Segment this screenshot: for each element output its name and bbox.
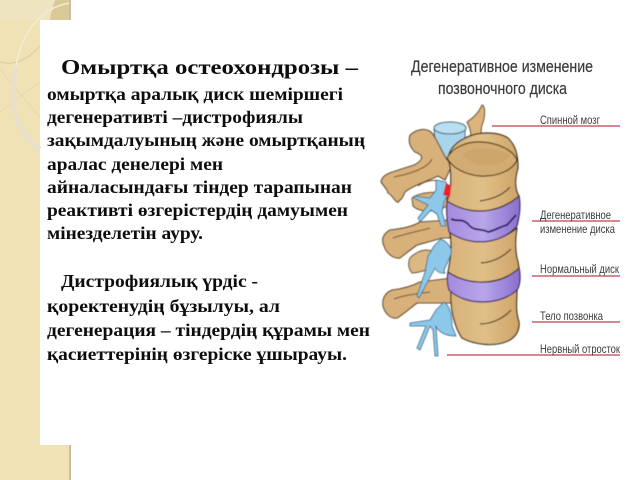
degenerative disc <box>447 196 520 242</box>
paragraph: dystrophy and degeneration: қоректенудің бұзылуы, ал <box>47 296 280 316</box>
normal disc <box>447 268 520 302</box>
paragraph: dystrophy and degeneration: қасиеттерінің өзгеріске ұшырауы. <box>47 344 347 364</box>
vertebra top surface <box>447 142 517 176</box>
nerve root lower <box>410 302 456 356</box>
main text block <box>47 55 370 364</box>
lower vertebra left process <box>383 278 452 318</box>
label lines <box>447 126 620 355</box>
paragraph: definition: мінезделетін ауру. <box>47 223 203 243</box>
labels: Дегенеративное <box>540 208 611 222</box>
paragraph: definition: зақымдалуының және омыртқаның <box>47 130 365 150</box>
spine diagram <box>381 57 621 356</box>
paragraph: dystrophy and degeneration: Дистрофиялық үрдіс - <box>61 271 258 291</box>
labels: Нормальный диск <box>540 262 620 276</box>
paragraph: definition: аралас денелері мен <box>47 154 223 174</box>
nerve root upper <box>417 239 451 298</box>
upper vertebral body <box>447 133 519 211</box>
paragraph: dystrophy and degeneration: дегенерация – тіндердің құрамы мен <box>47 320 370 340</box>
decorative beige frame <box>0 0 71 480</box>
upper vertebra processes <box>467 105 485 140</box>
labels: Тело позвонка <box>540 309 603 323</box>
labels: Спинной мозг <box>540 113 600 127</box>
middle vertebral body <box>448 228 519 282</box>
paragraph: definition: айналасындағы тіндер тарапынан <box>47 177 352 197</box>
paragraph: definition: омыртқа аралық диск шеміршегі <box>47 84 343 104</box>
left articular bump <box>412 192 447 211</box>
red lesion <box>443 183 451 197</box>
lowest vertebral body <box>451 290 519 345</box>
heading: Омыртқа остеохондрозы: Омыртқа остеохондрозы – <box>61 55 359 79</box>
paragraph: definition: дегенеративті –дистрофиялы <box>47 107 303 127</box>
middle vertebra left process <box>383 220 450 258</box>
diagram title <box>411 57 593 98</box>
paragraph: definition: реактивті өзгерістердің дамуымен <box>47 200 348 220</box>
labels <box>540 113 621 356</box>
paragraph: definition <box>47 84 365 243</box>
compressed nerve <box>414 180 450 226</box>
labels: Нервный отросток <box>540 342 621 356</box>
diagram title: позвоночного диска <box>438 79 567 98</box>
labels: изменение диска <box>540 222 615 236</box>
paragraph: dystrophy and degeneration <box>47 271 370 364</box>
diagram title: Дегенеративное изменение <box>411 57 593 76</box>
spinal cord <box>434 124 465 165</box>
spine illustration <box>381 105 520 356</box>
